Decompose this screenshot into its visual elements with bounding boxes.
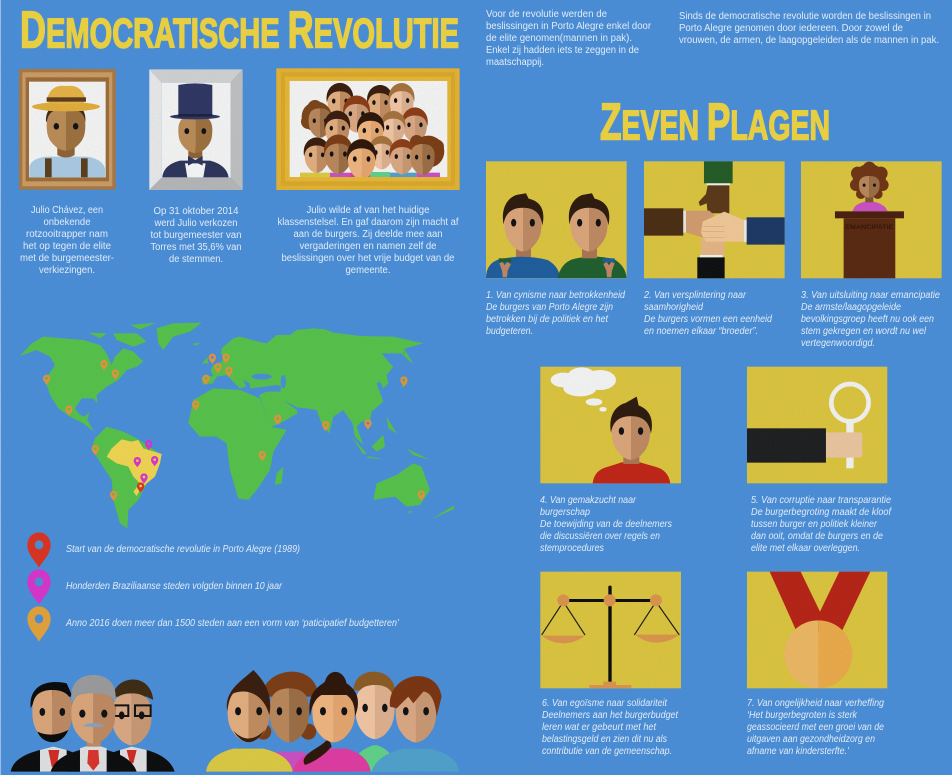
panel 1: two citizens xyxy=(486,161,627,278)
text: Julio Chávez: Julio Chávez, een xyxy=(31,205,103,216)
text: Julio Chávez: rotzooitrapper nam xyxy=(26,229,108,240)
text: Julio Chávez: verkiezingen. xyxy=(39,265,95,276)
map land masses xyxy=(20,323,455,528)
caption 3 xyxy=(801,290,940,349)
caption 4: burgerschap xyxy=(540,507,590,518)
caption 6 xyxy=(542,698,679,757)
caption 4: De toewijding van de deelnemers xyxy=(540,519,672,530)
magenta pins xyxy=(134,440,158,484)
caption 5: tussen burger en politiek kleiner xyxy=(751,519,878,530)
text: verkiezing 2014: Torres met 35,6% van xyxy=(150,242,242,253)
legend pin: magenta xyxy=(27,569,51,604)
caption 3: vertegenwoordigd. xyxy=(801,338,875,349)
legend text: 2016: Anno 2016 doen meer dan 1500 steden aan een vorm van ‘paticipatief budgetteren’ xyxy=(65,618,400,629)
panel 6: scales xyxy=(540,572,681,688)
caption 7: geassocieerd met een groei van de xyxy=(747,722,884,733)
caption 3: De armste/laagopgeleide xyxy=(801,302,901,313)
caption 2: saamhorigheid xyxy=(644,302,703,313)
text: sinds de revolutie xyxy=(679,11,939,46)
legend xyxy=(27,532,400,641)
caption 6: leren wat er gebeurt met het xyxy=(542,722,657,733)
legend text: Brazilian cities: Honderden Braziliaanse steden volgden binnen 10 jaar xyxy=(66,581,283,592)
caption 2: De burgers vormen een eenheid xyxy=(644,314,772,325)
caption 7: 7. Van ongelijkheid naar verheffing xyxy=(747,698,884,709)
caption 3: bevolkingsgroep heeft nu ook een xyxy=(801,314,934,325)
text: sinds de revolutie: vrouwen, de armen, de laagopgeleiden als de mannen in pak. xyxy=(679,35,939,46)
red pin: Porto Alegre xyxy=(137,482,144,493)
caption 6: contributie van de gemeenschap. xyxy=(542,746,672,757)
text: verkiezing 2014: Op 31 oktober 2014 xyxy=(154,206,239,217)
text: voor de revolutie: de elite genomen(mannen in pak). xyxy=(486,33,632,44)
caption 3: 3. Van uitsluiting naar emancipatie xyxy=(801,290,940,301)
panel 2: joined hands xyxy=(644,161,785,278)
text: verkiezing 2014 xyxy=(150,206,242,265)
panel 5: hand with magnifying glass xyxy=(747,367,887,483)
text: Julio gaf macht aan de burgers: aan de burgers. Zij deelde mee aan xyxy=(294,229,442,240)
world map xyxy=(20,323,455,528)
portrait: Julio the mayor in silver frame xyxy=(149,69,243,190)
caption 5: elite met elkaar overleggen. xyxy=(751,543,860,554)
title: Democratische Revolutie: DEMOCRATISCHE REVOLUTIE xyxy=(20,2,459,60)
caption 2: en noemen elkaar “broeder”. xyxy=(644,326,758,337)
caption 5 xyxy=(751,495,892,554)
portrait: Julio the farmer in wooden frame xyxy=(19,69,116,190)
caption 4: stemprocedures xyxy=(540,543,604,554)
caption 1: betrokken bij de politiek en het xyxy=(486,314,609,325)
panels row 3 xyxy=(540,572,887,688)
text: Julio Chávez xyxy=(20,205,114,276)
text: verkiezing 2014: de stemmen. xyxy=(169,254,223,265)
caption 3: stem gekregen en wordt nu wel xyxy=(801,326,927,337)
caption 1: budgeteren. xyxy=(486,326,533,337)
text: sinds de revolutie: Sinds de democratische revolutie worden de beslissingen in xyxy=(679,11,931,22)
text: Julio Chávez: met de burgemeester- xyxy=(20,253,114,264)
text: Julio Chávez: onbekende xyxy=(44,217,91,228)
caption 6: belastingsgeld en zien dit nu als xyxy=(542,734,667,745)
text: Julio Chávez: het op tegen de elite xyxy=(23,241,111,252)
caption 7: afname van kindersterfte.’ xyxy=(747,746,850,757)
caption 4: die discussiëren over regels en xyxy=(540,531,660,542)
caption 1: De burgers van Porto Alegre zijn xyxy=(486,302,613,313)
text: Julio gaf macht aan de burgers: klassenstelsel. En gaf daarom zijn macht af xyxy=(278,217,459,228)
caption 2: 2. Van versplintering naar xyxy=(643,290,747,301)
panels row 2 xyxy=(540,367,887,483)
caption 6: Deelnemers aan het burgerbudget xyxy=(542,710,679,721)
portrait: crowd in gold frame xyxy=(276,68,460,190)
panel 4: thinking citizen xyxy=(540,367,681,483)
captions row 1 xyxy=(486,290,940,349)
caption 4: 4. Van gemakzucht naar xyxy=(540,495,637,506)
panels row 1 xyxy=(486,161,942,278)
caption 7 xyxy=(747,698,884,757)
legend text: start: Start van de democratische revolutie in Porto Alegre (1989) xyxy=(66,544,300,555)
caption 4 xyxy=(540,495,672,554)
caption 2 xyxy=(643,290,772,337)
legend pin: red xyxy=(27,532,51,567)
captions row 2 xyxy=(540,495,892,554)
citizens group xyxy=(206,670,459,772)
text: Julio gaf macht aan de burgers: Julio wilde af van het huidige xyxy=(306,205,430,216)
portraits row xyxy=(19,68,460,190)
panel 3: woman at lectern xyxy=(801,161,942,278)
text: voor de revolutie: beslissingen in Porto Alegre enkel door xyxy=(486,21,652,32)
panel 3: woman at lectern: EMANCIPATIE xyxy=(845,225,893,231)
text: voor de revolutie: maatschappij. xyxy=(486,57,544,68)
caption 1: 1. Van cynisme naar betrokkenheid xyxy=(486,290,625,301)
panel 7: medal xyxy=(747,572,887,688)
caption 7: ‘Het burgerbegroten is sterk xyxy=(747,710,858,721)
text: sinds de revolutie: Porto Alegre genomen door iedereen. Door zowel de xyxy=(679,23,903,34)
text: Julio gaf macht aan de burgers: vergaderingen en namen zelf de xyxy=(300,241,437,252)
text: voor de revolutie xyxy=(486,9,652,68)
text: verkiezing 2014: tot burgemeester van xyxy=(150,230,242,241)
captions row 3 xyxy=(542,698,884,757)
caption 5: dan ooit, omdat de burgers en de xyxy=(751,531,883,542)
orange pins xyxy=(43,353,425,501)
text: Julio gaf macht aan de burgers: beslissingen over het vrije budget van de xyxy=(282,253,455,264)
text: Julio gaf macht aan de burgers: gemeente. xyxy=(346,265,390,276)
caption 1 xyxy=(486,290,625,337)
caption 6: 6. Van egoïsme naar solidariteit xyxy=(542,698,668,709)
legend pin: orange xyxy=(27,606,51,641)
caption 7: uitgaven aan gezondheidzorg en xyxy=(747,734,875,745)
Brazil highlighted xyxy=(107,439,162,496)
heading: Zeven Plagen: ZEVEN PLAGEN xyxy=(600,94,830,152)
text: verkiezing 2014: werd Julio verkozen xyxy=(154,218,238,229)
text: Julio gaf macht aan de burgers xyxy=(278,205,459,276)
caption 5: 5. Van corruptie naar transparantie xyxy=(751,495,891,506)
elite men in suits xyxy=(11,675,175,772)
text: voor de revolutie: Enkel zij hadden iets te zeggen in de xyxy=(486,45,639,56)
caption 5: De burgerbegroting maakt de kloof xyxy=(751,507,892,518)
text: voor de revolutie: Voor de revolutie werden de xyxy=(486,9,607,20)
